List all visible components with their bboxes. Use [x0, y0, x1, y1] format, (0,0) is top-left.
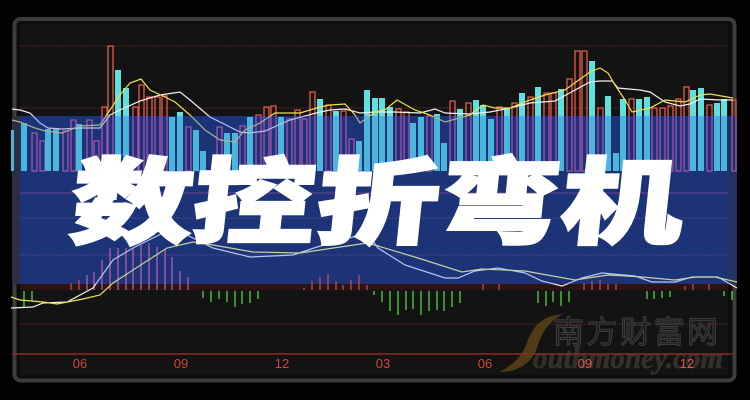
- title: 控: [188, 152, 321, 257]
- axis month labels right: 12: [680, 356, 694, 371]
- axis month labels left: 06: [73, 356, 87, 371]
- moving average lines: [12, 68, 733, 142]
- watermark chinese name: 南方财富网: [553, 315, 720, 350]
- MACD lines: [11, 228, 737, 308]
- title: 数: [66, 152, 199, 257]
- title: 折: [312, 152, 445, 257]
- watermark: [499, 314, 723, 375]
- MACD bars: [24, 243, 732, 315]
- title: [66, 152, 689, 257]
- icon: S swoosh: [499, 314, 563, 372]
- blue title band: [20, 116, 728, 284]
- title: 机: [556, 152, 689, 257]
- axis month labels left: 09: [174, 356, 188, 371]
- axis month labels left: 06: [478, 356, 492, 371]
- watermark domain: outhmoney.com: [533, 340, 723, 375]
- axis month labels left: 03: [376, 356, 390, 371]
- axis month labels right: 09: [578, 356, 592, 371]
- axis month labels right: [578, 356, 694, 371]
- title: 弯: [434, 152, 567, 257]
- axis month labels left: 12: [275, 356, 289, 371]
- baseline rule: [12, 353, 733, 355]
- volume bars above band: [101, 45, 737, 116]
- volume bars inside band: [11, 116, 737, 172]
- axis month labels left: [73, 356, 492, 371]
